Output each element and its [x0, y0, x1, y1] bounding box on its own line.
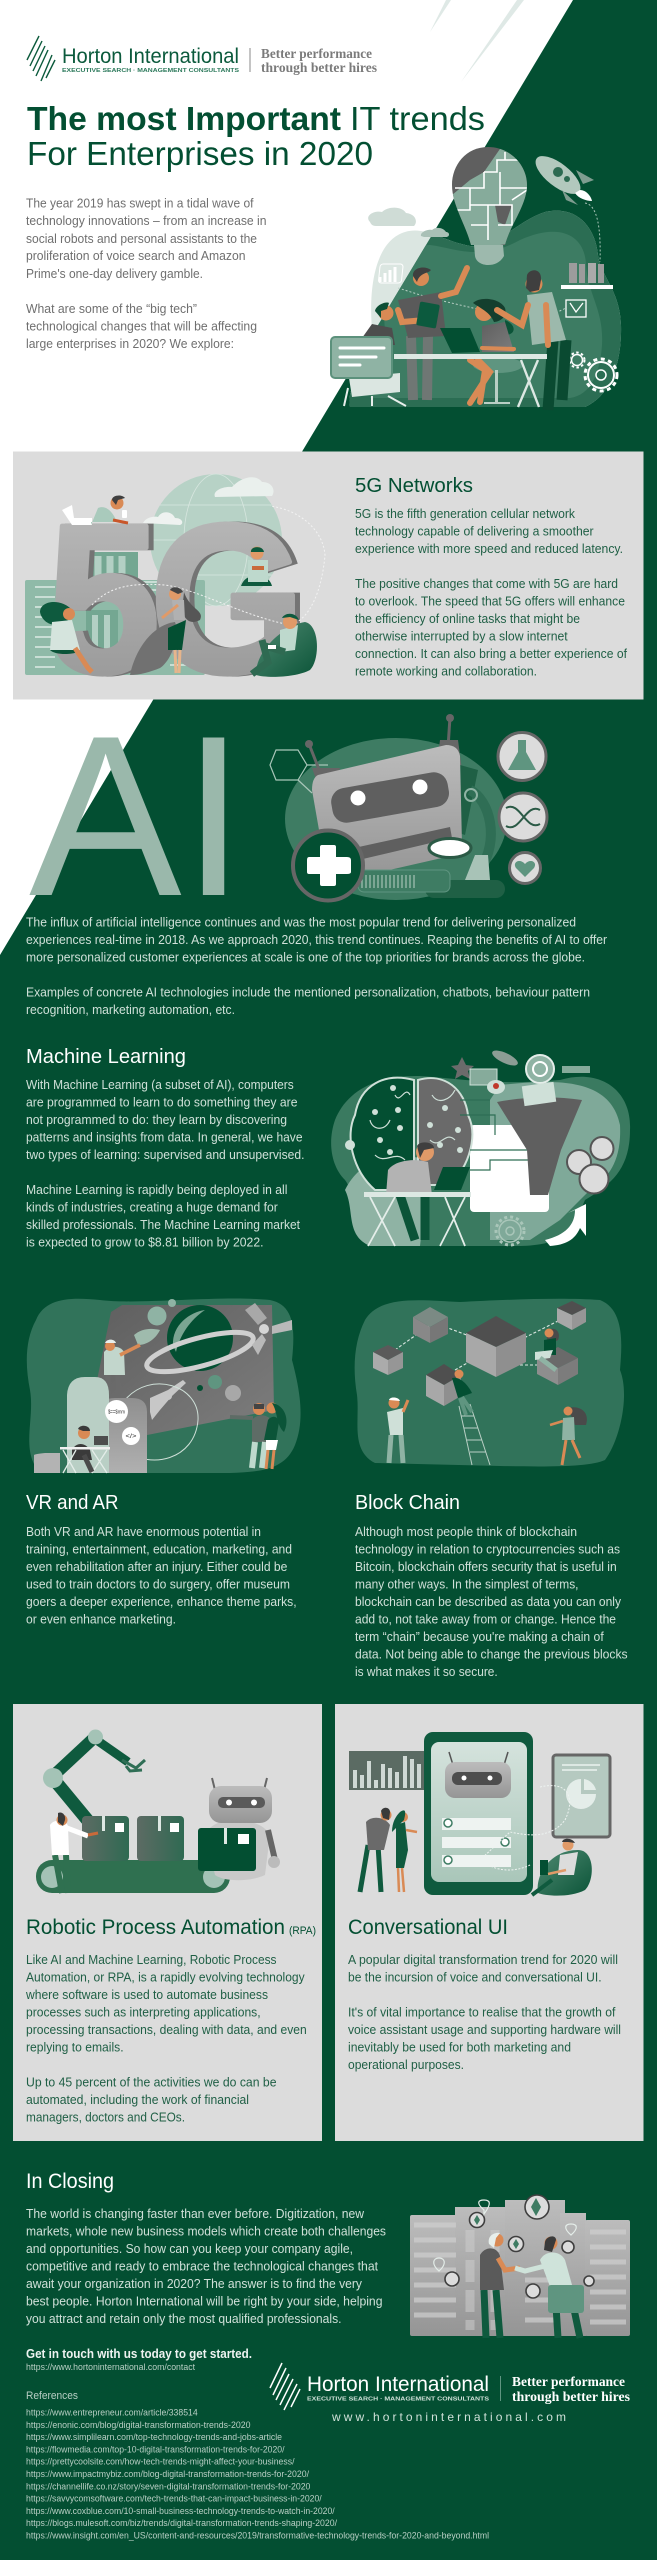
- references heading: References: [26, 2390, 78, 2402]
- AI text: The influx of artificial intelligence continues and was the most popular trend for delivering personalized: [26, 916, 576, 930]
- top icons: [451, 1048, 590, 1106]
- icon: DNA: [499, 793, 547, 841]
- man: [50, 1812, 98, 1893]
- references list: https://channellife.co.nz/story/seven-digital-transformation-trends-for-2020: [26, 2481, 310, 2491]
- bar chart: [349, 1751, 425, 1790]
- intro text: technology innovations – from an increase in: [26, 214, 267, 228]
- numeral 5 shadow: 5: [52, 480, 165, 717]
- body: Although most people think of blockchain: [355, 1525, 577, 1539]
- man pointing up: [398, 268, 467, 400]
- bar chart icon: [378, 264, 403, 283]
- logo name: Horton International: [62, 45, 239, 68]
- RPA text: [25, 1953, 307, 2125]
- brain: [345, 1078, 472, 1190]
- body: is what makes it so secure.: [355, 1665, 498, 1679]
- orbit path: [125, 1384, 198, 1460]
- panel lines: [35, 582, 190, 667]
- AI text: [26, 916, 607, 1017]
- body: or even enhance marketing.: [26, 1612, 176, 1626]
- phone robot: [445, 1752, 511, 1798]
- hexagon network: [270, 750, 328, 793]
- climbing person: [452, 1370, 472, 1415]
- body: Machine Learning is rapidly being deployed in all: [26, 1183, 287, 1197]
- AI text: recognition, marketing automation, etc.: [26, 1003, 235, 1017]
- AI illustration: robot: [270, 714, 547, 900]
- body: is expected to grow to $8.81 billion by 2022.: [26, 1236, 264, 1250]
- RPA heading: (RPA): [289, 1925, 316, 1937]
- 5G text: [355, 507, 628, 678]
- Conversational text: be the incursion of voice and conversational UI.: [348, 1971, 602, 1985]
- references list: https://www.entrepreneur.com/article/338514: [26, 2408, 198, 2418]
- lighter blob: [490, 1082, 620, 1240]
- references list: https://flowmedia.com/top-10-digital-transformation-trends-for-2020/: [26, 2444, 285, 2454]
- body: best people. Horton International will be right by your side, helping: [26, 2294, 383, 2308]
- Conversational UI illustration: [349, 1732, 610, 1896]
- heading: In Closing: [26, 2170, 114, 2193]
- references list: https://blogs.mulesoft.com/biz/trends/digital-transformation-trends-shaping-2020/: [26, 2518, 337, 2528]
- RPA text: where software is used to automate business: [25, 1988, 268, 2002]
- box three: [198, 1828, 256, 1871]
- call to action: Get in touch with us today to get started.: [26, 2347, 252, 2361]
- body: goers a deeper experience, enhance theme parks,: [26, 1595, 297, 1609]
- body: technology in relation to cryptocurrencies such as: [355, 1542, 620, 1556]
- panel: RPA: [13, 1704, 322, 2141]
- body: [355, 1525, 628, 1679]
- seated man: [362, 302, 395, 345]
- screen: [470, 1125, 549, 1212]
- Conversational text: inevitably be used for both marketing and: [348, 2041, 571, 2055]
- robot head: [312, 745, 462, 880]
- left lower blob: [345, 1156, 430, 1246]
- title: IT trends: [350, 100, 485, 137]
- beanbag man: [252, 614, 299, 674]
- cube big: [466, 1316, 526, 1377]
- body: kinds of industries, creating a huge demand for: [26, 1200, 278, 1214]
- 5G text: remote working and collaboration.: [355, 664, 537, 678]
- check box: [566, 300, 586, 317]
- tagline: [512, 2375, 631, 2405]
- numeral 5: 5: [47, 480, 160, 717]
- website: www.hortoninternational.com: [331, 2410, 566, 2424]
- ML illustration: [331, 1048, 630, 1246]
- section: VR and AR: [26, 1492, 297, 1626]
- connection badges: [445, 2195, 594, 2298]
- RPA text: managers, doctors and CEOs.: [26, 2111, 185, 2125]
- lightbulb: [452, 146, 532, 265]
- conveyor: [36, 1860, 230, 1893]
- cloud: [368, 208, 416, 226]
- laptop: [440, 328, 480, 353]
- intro text: The year 2019 has swept in a tidal wave of: [26, 196, 254, 210]
- desk worker: [60, 1426, 110, 1473]
- body: Bitcoin, blockchain offers security that is useful in: [355, 1560, 617, 1574]
- intro text: technological changes that will be affecting: [26, 320, 257, 334]
- blob: [27, 1299, 301, 1473]
- RPA heading: Robotic Process Automation: [26, 1916, 285, 1939]
- body: markets, whole new business models which create both challenges: [26, 2224, 386, 2238]
- Conversational text: operational purposes.: [348, 2058, 464, 2072]
- code badges: [105, 1400, 140, 1445]
- intro text: large enterprises in 2020? We explore:: [26, 337, 234, 351]
- blob on white side: [349, 211, 621, 407]
- body: two types of learning: supervised and unsupervised.: [26, 1148, 304, 1162]
- heading: Block Chain: [355, 1492, 460, 1514]
- desk and person: [364, 1142, 471, 1246]
- body: training, entertainment, education, marketing, and: [26, 1542, 292, 1556]
- ladder: [459, 1404, 490, 1465]
- letter G shadow: G: [155, 480, 310, 717]
- blob: [355, 1299, 624, 1466]
- Conversational text: voice assistant usage and supporting hardware will: [348, 2023, 621, 2037]
- 5G text: the efficiency of online tasks that might be: [355, 612, 580, 626]
- big AI lettering: AI: [29, 688, 245, 944]
- VR illustration: [27, 1299, 301, 1473]
- coins: [567, 1137, 614, 1194]
- references list: https://prettycoolsite.com/how-tech-trends-might-affect-your-business/: [26, 2457, 295, 2467]
- rock: [130, 622, 177, 675]
- planet: [167, 1305, 233, 1371]
- badge marks: [474, 2198, 541, 2249]
- panel: 5G: [13, 452, 644, 717]
- dashed links: [395, 1315, 570, 1370]
- AI text: more personalized customer experiences at scale is one of the top priorities for brands across the globe.: [26, 950, 585, 964]
- intro text: [26, 196, 267, 351]
- panel background: [335, 1704, 644, 2141]
- footer logo: [270, 2363, 631, 2424]
- references list: https://enonic.com/blog/digital-transformation-trends-2020: [26, 2420, 250, 2430]
- body: used to train doctors to do surgery, offer museum: [26, 1578, 290, 1592]
- funnel: [497, 1097, 582, 1195]
- RPA text: processing transactions, dealing with data, and even: [26, 2023, 307, 2037]
- lens: [429, 838, 471, 858]
- couple: [230, 1402, 287, 1469]
- logo divider: [250, 48, 251, 72]
- code badges: $==$mm: [108, 1410, 125, 1416]
- AI text: experiences real-time in 2018. As we approach 2020, this trend continues. Reaping the benefits of AI to offer: [26, 933, 607, 947]
- 5G text: technology capable of delivering a smoother: [355, 524, 594, 538]
- icon: medical cross badge: [293, 830, 363, 900]
- logo mark: [27, 36, 55, 81]
- body: patterns and insights from data. In general, we have: [26, 1130, 303, 1144]
- globe: [150, 474, 282, 606]
- body: competitive and ready to embrace the technological changes that: [26, 2260, 379, 2274]
- Conversational text: A popular digital transformation trend for 2020 will: [348, 1953, 618, 1967]
- couple: [360, 1808, 417, 1892]
- gear: [496, 1217, 524, 1245]
- Conversational text: It's of vital importance to realise that the growth of: [348, 2006, 616, 2020]
- section: Block Chain: [355, 1492, 628, 1679]
- header logo: [27, 36, 377, 81]
- heading: Machine Learning: [26, 1046, 186, 1068]
- tagline: Better performance: [512, 2375, 625, 2390]
- dotted signal: [92, 506, 325, 625]
- phone: [424, 1732, 533, 1895]
- chair lower: [344, 373, 406, 406]
- intro text: social robots and personal assistants to the: [26, 232, 257, 246]
- building windows: [470, 2230, 495, 2330]
- tablet: [553, 1755, 610, 1837]
- letter G: G: [150, 480, 305, 717]
- circuit lines: [460, 1100, 535, 1170]
- antennas: [305, 714, 462, 785]
- folders shelf: [561, 263, 613, 289]
- man left: [480, 2233, 520, 2338]
- RPA illustration: [36, 1730, 280, 1893]
- logo strapline: EXECUTIVE SEARCH · MANAGEMENT CONSULTANTS: [307, 2396, 490, 2402]
- beanbag: [256, 622, 317, 677]
- closing illustration: [410, 2195, 630, 2338]
- man right: [515, 2236, 584, 2338]
- references list: https://www.insight.com/en_US/content-and-resources/2019/transformative-technology-trends-for-2020-and-beyond.html: [26, 2530, 489, 2540]
- references list: https://savvycomsoftware.com/tech-trends-that-can-impact-business-in-2020/: [26, 2494, 322, 2504]
- cube right: [537, 1347, 578, 1385]
- section: Machine Learning: [26, 1046, 630, 1250]
- blob: [331, 1076, 630, 1246]
- clouds: [215, 477, 274, 497]
- box one: [82, 1816, 129, 1861]
- tagline: Better performance: [261, 46, 372, 61]
- astronaut: [150, 1380, 186, 1420]
- scanner bar: [358, 870, 450, 892]
- RPA text: replying to emails.: [26, 2041, 124, 2055]
- dashed connection: [398, 288, 566, 318]
- contact link: https://www.hortoninternational.com/contact: [26, 2362, 195, 2373]
- body: [26, 1525, 297, 1626]
- heading: VR and AR: [26, 1492, 118, 1514]
- RPA text: processes such as interpreting applications,: [26, 2006, 261, 2020]
- moons: [148, 1299, 241, 1401]
- references list: https://www.coxblue.com/10-small-business-technology-trends-to-watch-in-2020/: [26, 2506, 335, 2516]
- RPA text: Up to 45 percent of the activities we do can be: [26, 2076, 277, 2090]
- panel: Conversational UI: [335, 1704, 644, 2141]
- sitting woman: [40, 602, 92, 672]
- body: data. Not being able to change the previous blocks: [355, 1648, 628, 1662]
- logo strapline: EXECUTIVE SEARCH · MANAGEMENT CONSULTANTS: [62, 68, 240, 74]
- references list: https://www.impactmybiz.com/blog-digital-transformation-trends-for-2020/: [26, 2469, 309, 2479]
- intro text: What are some of the “big tech”: [26, 302, 197, 316]
- table: [394, 354, 547, 407]
- 5G illustration: [25, 474, 325, 717]
- planet highlight: [173, 1310, 205, 1352]
- cube top: [413, 1307, 448, 1343]
- cross-legged man: [241, 546, 272, 586]
- small cloud: [143, 512, 182, 525]
- chat bubbles: [442, 1818, 511, 1867]
- person on top of 5: [62, 496, 128, 525]
- title: [27, 100, 485, 172]
- hero illustration: team brainstorming: [331, 146, 621, 410]
- tagline: [261, 46, 377, 75]
- robot: [206, 1778, 280, 1880]
- 5G text: experience with more speed and reduced latency.: [355, 542, 623, 556]
- body: not programmed to do: they learn by discovering: [26, 1113, 287, 1127]
- building stripes: [414, 2225, 626, 2322]
- intro text: Prime's one-day delivery gamble.: [26, 267, 203, 281]
- standing woman: [162, 587, 201, 673]
- body: term “chain” because you're making a chain of: [355, 1630, 604, 1644]
- cube top right: [557, 1301, 586, 1330]
- title: The most Important: [27, 100, 341, 137]
- dotted signal: [480, 1786, 570, 1870]
- microscope: [425, 765, 505, 898]
- body: skilled professionals. The Machine Learning market: [26, 1218, 301, 1232]
- icon: flask: [498, 732, 546, 780]
- 5G text: The positive changes that come with 5G are hard: [355, 577, 618, 591]
- grey pedestals: [34, 1377, 147, 1473]
- panel background: [13, 1704, 322, 2141]
- buildings: [410, 2200, 630, 2336]
- icon: heart: [510, 852, 540, 884]
- Conversational heading: Conversational UI: [348, 1916, 508, 1939]
- body: [26, 1078, 304, 1250]
- section: In Closing: [26, 2170, 630, 2540]
- body: are programmed to learn to do something they are: [26, 1096, 298, 1110]
- panel background: [13, 452, 644, 700]
- 5G text: to overlook. The speed that 5G offers will enhance: [355, 594, 625, 608]
- code badges: </>: [126, 1434, 137, 1440]
- standing man: [497, 270, 566, 410]
- logo mark: [270, 2363, 300, 2410]
- 5G text: 5G is the fifth generation cellular network: [355, 507, 576, 521]
- body: With Machine Learning (a subset of AI), computers: [26, 1078, 294, 1092]
- body: you attract and retain only the most qualified professionals.: [26, 2312, 342, 2326]
- logo name: Horton International: [307, 2373, 489, 2396]
- man standing: [387, 1397, 408, 1463]
- body: [26, 2207, 386, 2326]
- rocket: [530, 149, 600, 262]
- body: even rehabilitation after an injury. Either could be: [26, 1560, 287, 1574]
- tagline: through better hires: [512, 2390, 631, 2405]
- body: and opportunities. So how can you keep your company agile,: [26, 2242, 353, 2256]
- painter: [104, 1340, 140, 1398]
- tagline: through better hires: [261, 60, 377, 75]
- references list: [26, 2408, 489, 2540]
- body: Both VR and AR have enormous potential in: [26, 1525, 261, 1539]
- screen: [95, 1305, 274, 1436]
- location pins: [434, 2200, 576, 2271]
- body: await your organization in 2020? The answer is to find the very: [26, 2277, 363, 2291]
- Conversational text: [348, 1953, 621, 2072]
- AI text: Examples of concrete AI technologies include the mentioned personalization, chatbots, behaviour pattern: [26, 986, 590, 1000]
- satellite: [245, 1303, 292, 1355]
- cube lower: [426, 1364, 461, 1406]
- arrow: [545, 1204, 586, 1246]
- 5G text: otherwise interrupted by a slow internet: [355, 630, 568, 644]
- body: many other ways. In the simplest of terms,: [355, 1578, 578, 1592]
- chair sheet: [331, 337, 392, 378]
- beanbag person: [532, 1839, 592, 1896]
- intro text: proliferation of voice search and Amazon: [26, 249, 246, 263]
- back panel: [25, 580, 205, 675]
- 5G heading: 5G Networks: [355, 475, 473, 497]
- globe grid: [150, 474, 282, 606]
- painter rocket: [134, 1329, 160, 1345]
- planet ring: [143, 1324, 257, 1380]
- RPA text: Like AI and Machine Learning, Robotic Process: [26, 1953, 276, 1967]
- building: [86, 552, 138, 652]
- woman walking: [550, 1406, 587, 1465]
- title: For Enterprises in 2020: [27, 135, 373, 172]
- RPA text: Automation, or RPA, is a rapidly evolving technology: [26, 1971, 305, 1985]
- woman with laptop: [470, 299, 523, 404]
- cube small left: [373, 1345, 403, 1375]
- body: add to, not take away from or change. Hence the: [355, 1612, 616, 1626]
- woman on cube: [535, 1328, 559, 1370]
- RPA text: automated, including the work of financial: [26, 2093, 249, 2107]
- decorative streaks: [430, 0, 524, 82]
- body: The world is changing faster than ever before. Digitization, new: [26, 2207, 365, 2221]
- robot arm: [43, 1730, 145, 1828]
- 5G text: connection. It can also bring a better experience of: [355, 647, 628, 661]
- blob on green side: [349, 211, 621, 407]
- Block Chain illustration: [355, 1299, 624, 1466]
- divider: [500, 2376, 501, 2401]
- small cloud: [421, 228, 449, 237]
- body: blockchain can be described as data you can only: [355, 1595, 622, 1609]
- gears: [570, 352, 617, 391]
- green ellipse: [285, 738, 507, 900]
- references list: https://www.simplilearn.com/top-technology-trends-and-jobs-article: [26, 2432, 282, 2442]
- box two: [137, 1816, 184, 1861]
